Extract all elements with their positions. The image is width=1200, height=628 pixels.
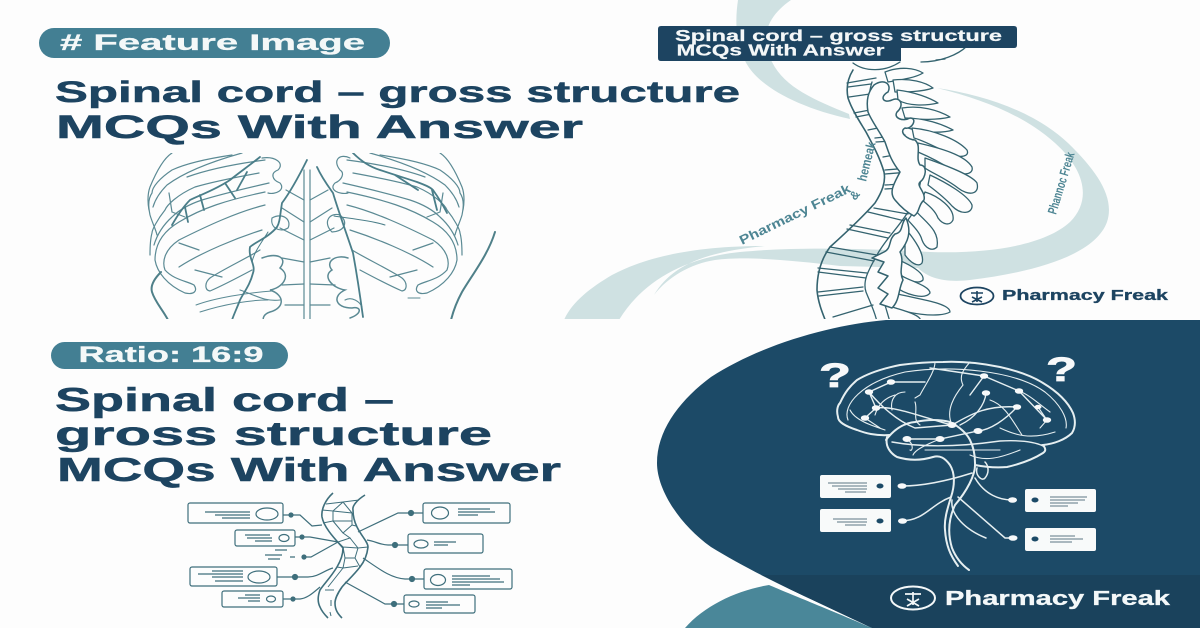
curved labels along swoosh: Pharmacy Freak — [737, 180, 854, 248]
logo: pharmacy freak footer — [891, 586, 1171, 610]
cord — [318, 493, 343, 618]
callout: title box over spine — [658, 26, 1017, 61]
tag: ratio — [51, 342, 288, 369]
heading: top left title: Spinal cord – gross structure — [55, 76, 740, 109]
tag: feature image — [39, 28, 390, 58]
icon: question marks: ? — [1046, 351, 1077, 389]
tag: ratio: Ratio: 16:9 — [78, 342, 264, 367]
decorative teal circle — [685, 585, 872, 628]
icon: question marks: ? — [819, 357, 851, 395]
logo: pharmacy freak footer: Pharmacy Freak — [945, 588, 1171, 610]
logo: pharmacy freak top: Pharmacy Freak — [1002, 287, 1169, 304]
cards: brain labels — [820, 475, 1096, 551]
illustration: rib cage line drawing — [148, 153, 495, 322]
callout: title box over spine: Spinal cord – gross structure — [675, 28, 1002, 45]
brain outline — [837, 362, 1075, 467]
left ribs (mirror) — [148, 153, 269, 294]
heading: bottom left title: MCQs With Answer — [57, 451, 561, 488]
decorative swoosh bands — [564, 0, 1109, 320]
icon: question marks — [819, 351, 1077, 395]
vertebra chains — [262, 156, 350, 193]
footer: darker strip — [761, 575, 1200, 628]
card: left upper — [820, 475, 891, 498]
card: right lower — [1025, 528, 1096, 551]
curved labels along swoosh: Phannoc Freak — [1045, 150, 1078, 216]
heading: bottom left title: gross structure — [55, 415, 492, 452]
nodes — [861, 373, 1051, 541]
illustration: brain network — [837, 362, 1075, 570]
illustration: spine side view — [817, 46, 977, 322]
card: left lower — [820, 509, 891, 532]
heading: bottom left title: Spinal cord – — [55, 381, 394, 418]
inner folds and links — [865, 368, 1047, 439]
callout: title box over spine: MCQs With Answer — [676, 42, 884, 60]
heading: bottom left title — [55, 381, 561, 488]
logo: pharmacy freak top — [960, 287, 1169, 304]
central vertebrae — [304, 170, 310, 320]
skull arcs — [853, 46, 967, 70]
heading: top left title: MCQs With Answer — [56, 109, 583, 145]
right ribs — [343, 153, 464, 294]
vertebral bodies — [817, 70, 885, 322]
spinous processes — [885, 68, 977, 322]
heading: top left title — [55, 76, 740, 145]
nerves — [902, 462, 1013, 538]
diagram: spinal cord with labelled cards — [188, 493, 512, 618]
curved labels along swoosh: & — [847, 187, 863, 203]
left cards — [188, 503, 322, 526]
vessels — [172, 153, 447, 320]
articular chain — [867, 82, 925, 308]
curved labels along swoosh — [737, 140, 1078, 248]
panel: dark blue curved background — [657, 320, 1200, 628]
hip lines — [451, 232, 495, 320]
curved labels along swoosh: hemeak — [854, 140, 879, 183]
right cards — [358, 503, 510, 532]
card: right upper — [1025, 489, 1096, 512]
tag: feature image: # Feature Image — [60, 30, 365, 55]
